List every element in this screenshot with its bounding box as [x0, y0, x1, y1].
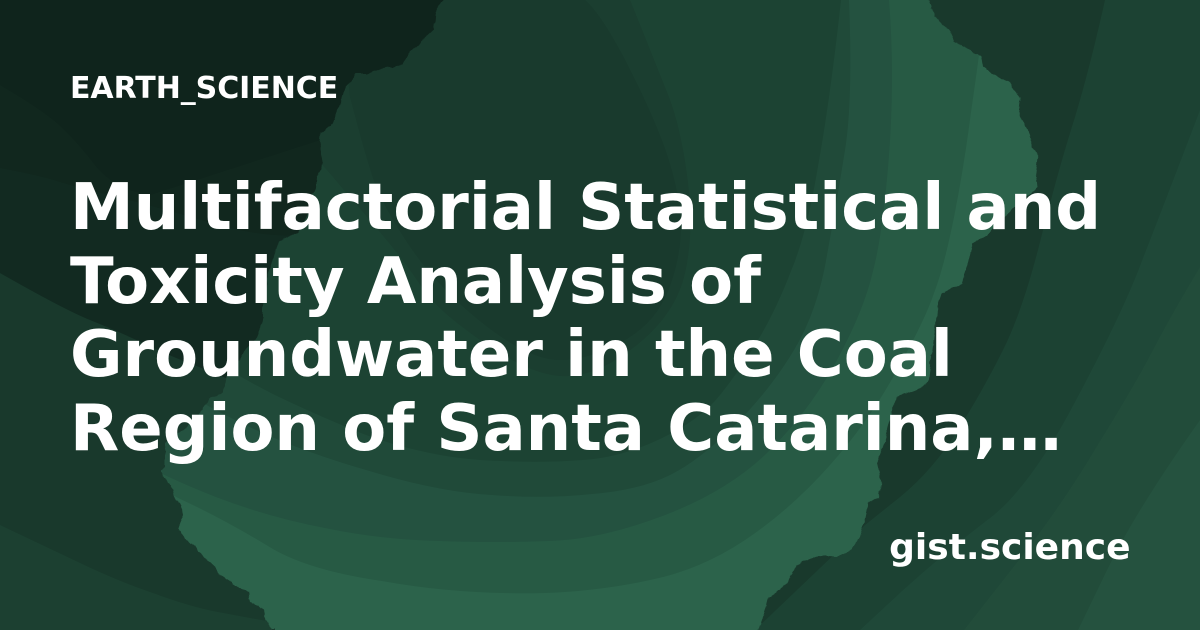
title: Toxicity Analysis of	[70, 245, 761, 319]
title: Multifactorial Statistical and	[70, 171, 1101, 245]
site name: gist.science	[889, 527, 1130, 568]
inner blob with contour bands	[161, 0, 1038, 630]
category label: EARTH_SCIENCE	[70, 71, 338, 106]
title	[70, 171, 1101, 466]
title: Region of Santa Catarina,…	[70, 392, 1062, 466]
title: Groundwater in the Coal	[70, 318, 953, 392]
